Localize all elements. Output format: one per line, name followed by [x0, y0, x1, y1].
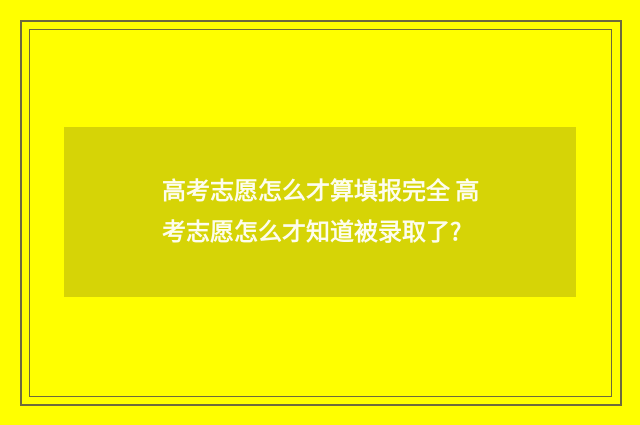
title text: 高考志愿怎么才算填报完全 高: [162, 178, 479, 205]
title text: 考志愿怎么才知道被录取了?: [162, 212, 461, 247]
title panel: [64, 127, 576, 297]
inner frame: [29, 29, 612, 397]
title text: [162, 178, 479, 247]
